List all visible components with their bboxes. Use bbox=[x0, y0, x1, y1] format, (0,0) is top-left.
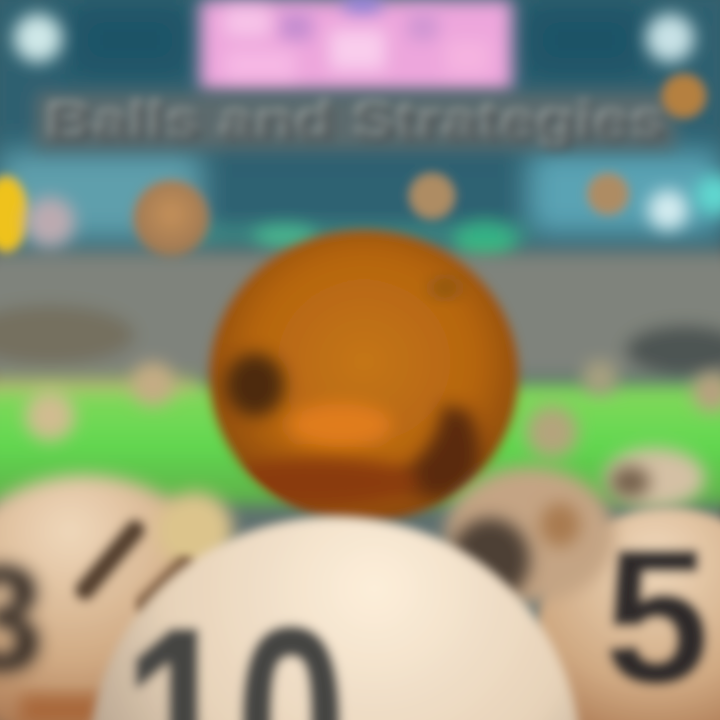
ball: field far right bbox=[582, 360, 618, 396]
light: right lower bbox=[648, 190, 688, 230]
ball: right edge bbox=[692, 372, 720, 412]
ball: top right orange bbox=[662, 74, 706, 118]
floating lights and small balls bbox=[0, 14, 720, 458]
blurred title band: Balls and Strategies bbox=[48, 95, 668, 151]
ball: pale left bbox=[25, 197, 75, 247]
ball: field left rear bbox=[131, 362, 175, 406]
ball: cyan far right bbox=[695, 175, 720, 215]
ball: field left bbox=[25, 391, 75, 441]
blurred title band bbox=[35, 91, 675, 151]
ball: right tan bbox=[587, 173, 629, 215]
ball: field right bbox=[526, 406, 578, 458]
ball: centre tan bbox=[409, 173, 455, 219]
cream ball: number 5: 5 bbox=[604, 511, 710, 720]
blurred title band: Balls and Strategies bbox=[45, 91, 665, 147]
cream ball: left with numbers bbox=[0, 475, 235, 720]
large orange ball bbox=[209, 230, 519, 522]
ball: yellow left bbox=[0, 176, 28, 252]
green accents under stands bbox=[190, 220, 530, 260]
grey stadium band bbox=[0, 254, 720, 376]
cream ball: rear right bbox=[445, 448, 705, 603]
teal stand glow bbox=[0, 5, 720, 240]
ball: large tan bbox=[133, 180, 209, 256]
light: top left bbox=[14, 14, 62, 62]
pink banner bbox=[200, 0, 512, 92]
cream ball: number 5 bbox=[536, 508, 720, 720]
light: top right bbox=[646, 14, 694, 62]
green field bbox=[0, 376, 720, 505]
